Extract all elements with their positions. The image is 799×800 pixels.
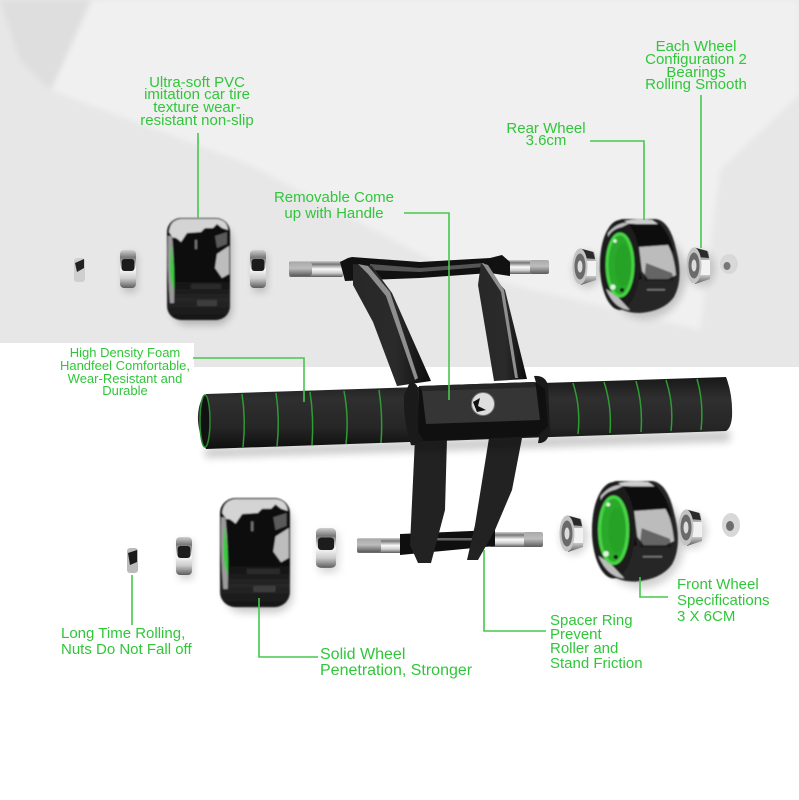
- centre sleeve: [404, 376, 550, 445]
- callout: spacer ring: Roller and: [550, 640, 618, 657]
- callout: rear wheel: Rear Wheel: [506, 120, 586, 137]
- callout: high density foam: Durable: [102, 383, 148, 398]
- callout: long time rolling: Nuts Do Not Fall off: [61, 641, 192, 658]
- callout: front wheel: Front Wheel: [677, 576, 759, 593]
- callout: rear wheel: 3.6cm: [526, 132, 566, 149]
- wheel: top left side view: [167, 218, 232, 325]
- callout: each wheel bearings: Rolling Smooth: [645, 76, 747, 93]
- callout: front wheel: 3 X 6CM: [677, 608, 735, 625]
- callout: ultra-soft PVC: resistant non-slip: [140, 112, 254, 129]
- bearing: rear inner: [572, 248, 601, 288]
- callout: each wheel bearings: Each Wheel: [656, 38, 736, 55]
- callout: high density foam: High Density Foam: [70, 345, 180, 360]
- callout: ultra-soft PVC: imitation car tire: [144, 86, 250, 103]
- callout: high density foam: Wear-Resistant and: [68, 371, 182, 386]
- lower frame with axle and arms: [357, 438, 543, 563]
- callout: each wheel bearings: [645, 38, 747, 93]
- bearing: bottom left outer: [176, 537, 193, 579]
- lower left axle: [357, 538, 403, 553]
- bearing: rear outer: [686, 247, 715, 287]
- leader lines: [132, 95, 701, 657]
- wheel: bottom left side view: [220, 498, 292, 612]
- callout: long time rolling: [61, 625, 192, 658]
- callout: ultra-soft PVC: [140, 74, 254, 129]
- callout: spacer ring: Prevent: [550, 626, 603, 643]
- callout: solid wheel: Penetration, Stronger: [320, 662, 473, 679]
- callout: ultra-soft PVC: texture wear-: [153, 99, 241, 116]
- callout: removable handle: Removable Come: [274, 189, 394, 206]
- callout: front wheel: Specifications: [677, 592, 770, 609]
- foam handle bar: [198, 376, 732, 458]
- lower right axle: [490, 532, 543, 547]
- callout: spacer ring: [550, 612, 643, 672]
- bearing: bottom left inner: [316, 528, 337, 572]
- callout: each wheel bearings: Configuration 2: [645, 51, 747, 68]
- callout: solid wheel: [320, 646, 473, 679]
- callout: solid wheel: Solid Wheel: [320, 646, 405, 663]
- callout: removable handle: [274, 189, 394, 222]
- nut: front: [722, 513, 740, 537]
- right arm: [478, 263, 527, 381]
- bearing: front inner: [560, 515, 588, 555]
- callout: spacer ring: Spacer Ring: [550, 612, 633, 629]
- bearing: front outer: [678, 509, 707, 549]
- callout: rear wheel: [506, 120, 586, 149]
- right axle: [498, 260, 549, 274]
- wheel: rear right: [600, 219, 686, 319]
- callout: spacer ring: Stand Friction: [550, 655, 643, 672]
- lower left arm: [410, 438, 447, 563]
- callout: high density foam: [60, 345, 190, 398]
- nut: rear: [720, 254, 738, 274]
- left arm: [353, 264, 431, 386]
- nut: bottom left: [127, 548, 138, 573]
- callout: long time rolling: Long Time Rolling,: [61, 625, 185, 642]
- callout: front wheel: [677, 576, 770, 625]
- nut: top left: [74, 258, 85, 282]
- crossbar: [340, 255, 510, 281]
- callout: high density foam: Handfeel Comfortable,: [60, 358, 190, 373]
- bearing: top left inner: [250, 250, 267, 292]
- bearing: top left outer: [120, 250, 137, 292]
- green rings: [242, 379, 702, 447]
- left axle: [289, 261, 343, 277]
- lower crossbar: [400, 530, 495, 555]
- upper frame with axle and arms: [289, 255, 549, 386]
- callout: ultra-soft PVC: Ultra-soft PVC: [149, 74, 245, 91]
- chrome bolt: [472, 392, 494, 416]
- lower right arm: [467, 438, 522, 560]
- callout: each wheel bearings: Bearings: [666, 64, 726, 81]
- wheel: front right: [592, 481, 685, 588]
- callout: removable handle: up with Handle: [284, 205, 384, 222]
- background: grey upper panel: [0, 0, 799, 435]
